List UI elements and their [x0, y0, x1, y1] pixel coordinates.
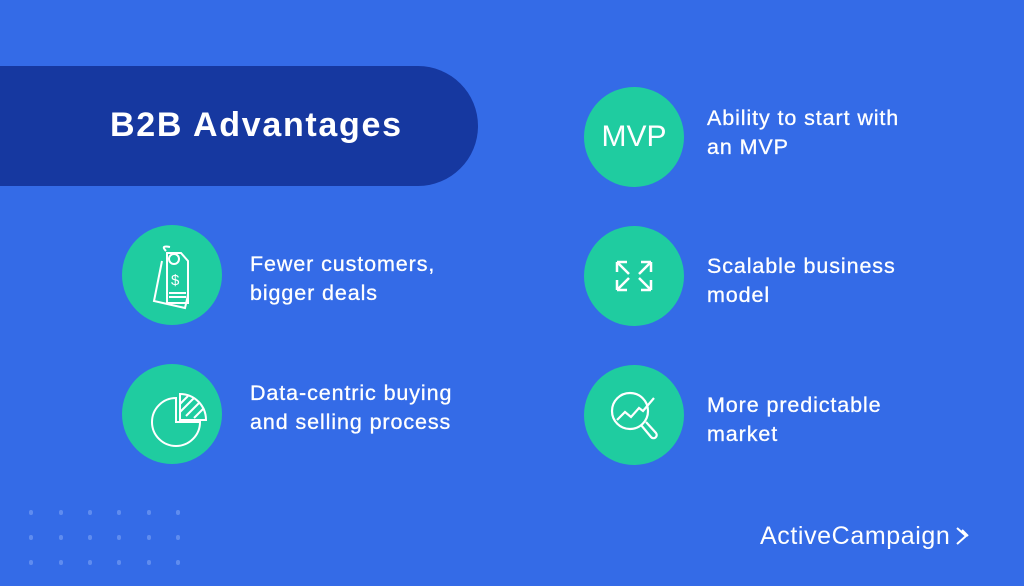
item: data-centric	[122, 364, 452, 464]
logo: ActiveCampaign	[760, 522, 950, 550]
item: MVP	[584, 87, 899, 187]
icon: expand arrows	[584, 226, 684, 326]
icon: pie chart	[122, 364, 222, 464]
text: bigger deals	[250, 281, 378, 305]
item: predictable	[584, 365, 882, 465]
text	[707, 393, 882, 446]
icon: magnifier chart	[584, 365, 684, 465]
text	[706, 106, 899, 159]
title: B2B Advantages	[110, 106, 403, 144]
text: model	[707, 283, 770, 307]
text: More predictable	[707, 393, 882, 417]
dots decoration	[29, 510, 180, 565]
text	[707, 254, 896, 307]
icon: price tags	[122, 225, 222, 325]
icon: MVP	[584, 87, 684, 187]
text: Ability to start with	[707, 106, 899, 130]
icon: MVP: MVP	[601, 120, 666, 153]
icon: price tags: $	[171, 272, 180, 289]
text: and selling process	[250, 410, 451, 434]
item: fewer customers	[122, 225, 435, 325]
text: Data-centric buying	[250, 381, 452, 405]
text	[250, 381, 452, 434]
text: market	[707, 422, 778, 446]
text	[250, 252, 435, 305]
title pill	[0, 66, 478, 186]
text: Scalable business	[707, 254, 896, 278]
text: an MVP	[707, 135, 789, 159]
text: Fewer customers,	[250, 252, 435, 276]
item: scalable	[584, 226, 896, 326]
